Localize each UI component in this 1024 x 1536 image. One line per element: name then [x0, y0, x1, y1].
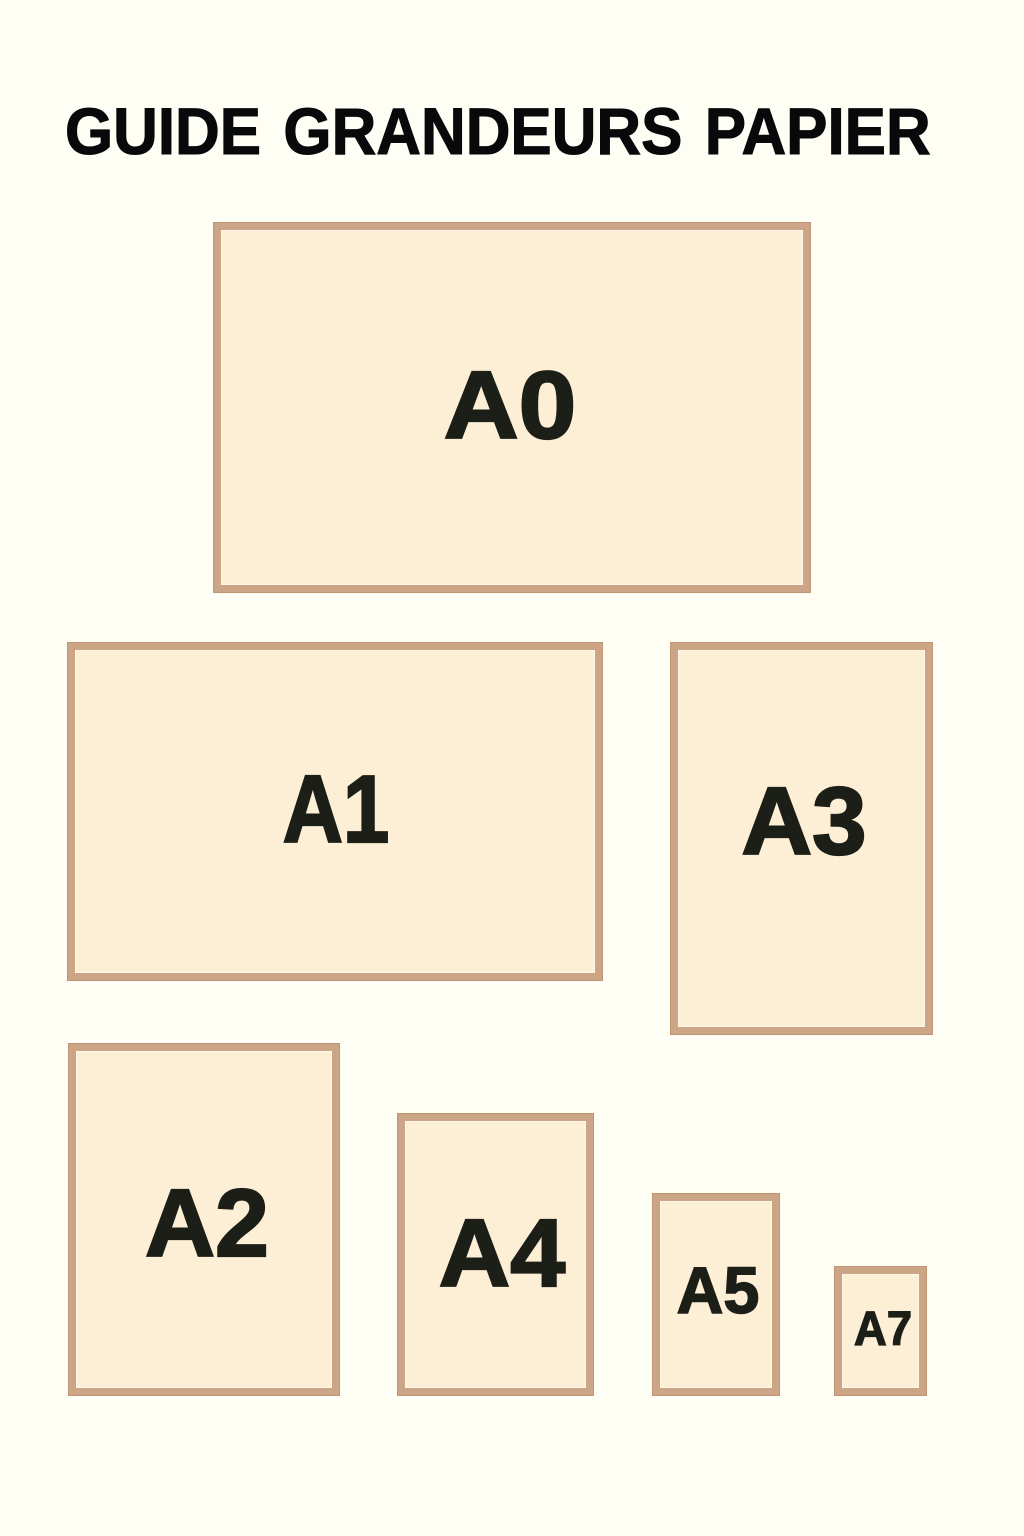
panel: A7 sheet	[834, 1266, 927, 1396]
panel: A2 sheet	[68, 1043, 340, 1396]
label: A7: A7	[854, 1303, 912, 1356]
panel: A4 sheet	[397, 1113, 594, 1396]
label: A0: A0	[444, 352, 576, 459]
label: A2: A2	[145, 1170, 269, 1277]
label: A5: A5	[677, 1253, 759, 1327]
panel: A1 sheet	[67, 642, 603, 981]
panel: A3 sheet	[670, 642, 933, 1035]
panel: A5 sheet	[652, 1193, 780, 1396]
label: A4: A4	[439, 1200, 565, 1307]
label: A3: A3	[741, 768, 867, 875]
panel: A0 sheet	[213, 222, 811, 593]
label: A1: A1	[283, 756, 389, 863]
title: GUIDE GRANDEURS PAPIER	[65, 94, 931, 168]
